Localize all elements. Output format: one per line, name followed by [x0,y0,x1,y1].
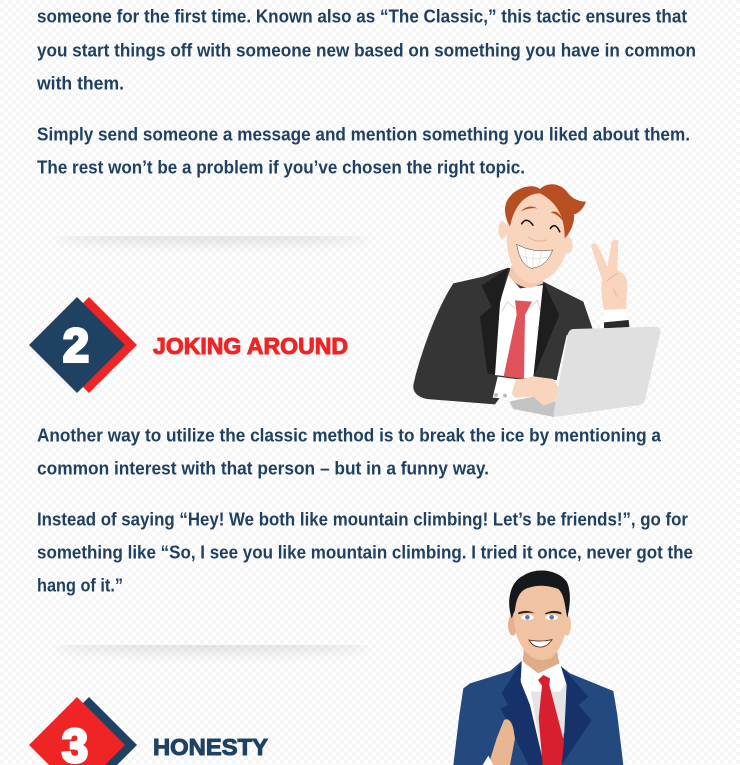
number badge 3 [29,697,137,765]
text block: intro paragraph: you start things off with someone new based on something you have in common [37,40,696,60]
eyebrows [518,611,561,614]
tie [504,300,532,379]
heading: joking around: JOKING AROUND [153,333,348,359]
neck [508,262,543,288]
number badge 2: 2 [63,318,89,372]
lapels [501,661,592,765]
nose [528,237,547,241]
shadow divider 1 [64,236,358,247]
left cuff [493,377,516,399]
text block: mountain climbing example [37,508,693,596]
eyebrows [521,206,564,222]
text block: intro paragraph: someone for the first time. Known also as “The Classic,” this tactic ensures that [37,6,687,26]
face [514,585,567,660]
hand on keyboard [511,376,559,406]
jacket [413,268,593,404]
face [507,192,569,283]
heading: honesty: HONESTY [153,734,268,760]
illustration: smiling man with laptop [413,184,660,417]
hair [509,571,570,618]
collar [521,661,561,692]
jacket [453,661,623,765]
laptop screen [553,327,660,417]
text block: send a message paragraph [37,124,690,178]
ears [498,221,507,239]
shirt [494,275,543,379]
number badge 2 [29,297,137,393]
text block: classic method paragraph: Another way to utilize the classic method is to break the ice by mentioning a [37,424,662,446]
text block: intro paragraph [36,6,696,94]
tie [538,675,564,765]
text block: mountain climbing example: something like “So, I see you like mountain climbing. I tried it once, never got the [37,542,693,562]
victory hand [591,239,627,310]
shirt cuff [604,309,628,322]
text block: send a message paragraph: The rest won’t be a problem if you’ve chosen the right topic. [37,156,525,178]
teeth [517,244,553,268]
neck [523,645,559,673]
hand [488,719,515,765]
illustration: man in blue suit offering handshake [453,571,623,765]
text block: classic method paragraph [37,424,662,478]
eyes [521,615,534,620]
laptop base [509,397,557,417]
shadow divider 2 [64,645,358,656]
text block: classic method paragraph: common interest with that person – but in a funny way. [37,458,489,478]
hair [505,184,586,238]
shirt [521,660,567,765]
text block: intro paragraph: with them. [36,72,124,94]
text block: send a message paragraph: Simply send someone a message and mention something you liked about them. [37,124,690,144]
text block: mountain climbing example: hang of it.” [37,574,123,596]
lapels [480,268,559,378]
sleeve [604,320,629,328]
mouth [529,640,552,647]
smiling eyes [521,220,560,232]
ears [508,614,517,636]
text block: mountain climbing example: Instead of saying “Hey! We both like mountain climbing! Let’s be friends!”, go for [37,508,688,530]
